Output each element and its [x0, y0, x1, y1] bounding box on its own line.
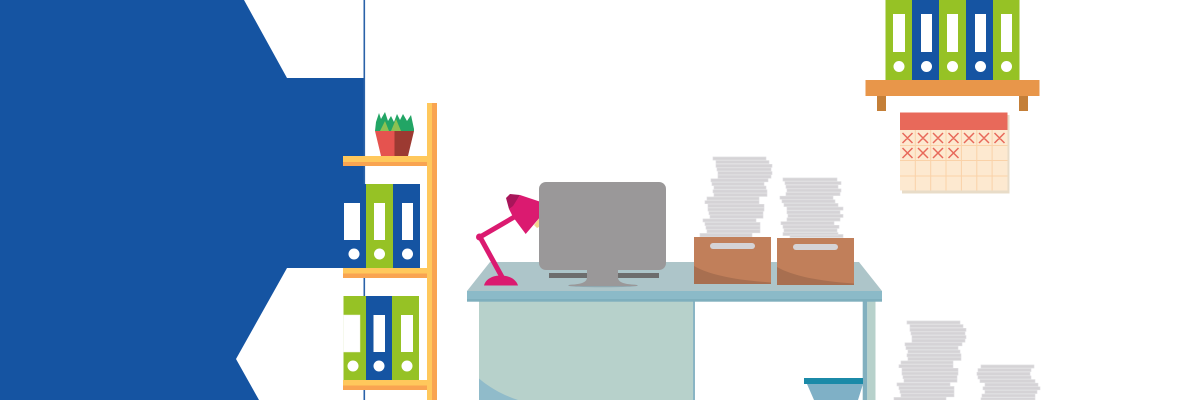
top shelf: [343, 156, 427, 166]
blue arrow panel: [0, 0, 365, 400]
calendar: [900, 112, 1010, 194]
paper stack on right tray: [780, 178, 843, 238]
wall shelf binders: [886, 0, 1020, 80]
lower shelf binders: [344, 296, 419, 380]
middle shelf: [343, 268, 427, 278]
left file box: [694, 237, 771, 284]
lower shelf: [343, 380, 427, 390]
bookcase post: [427, 103, 437, 400]
desk lamp: [476, 194, 541, 286]
wall shelf: [866, 80, 1040, 111]
floor paper stack short: [977, 365, 1040, 400]
monitor: [539, 182, 666, 287]
right file box: [777, 238, 854, 285]
floor paper stack tall: [894, 321, 966, 400]
potted plant: [375, 112, 414, 156]
middle shelf binders: [343, 184, 420, 268]
desk: [467, 262, 882, 400]
waste bin: [804, 378, 863, 400]
paper stack on left tray: [700, 157, 772, 237]
